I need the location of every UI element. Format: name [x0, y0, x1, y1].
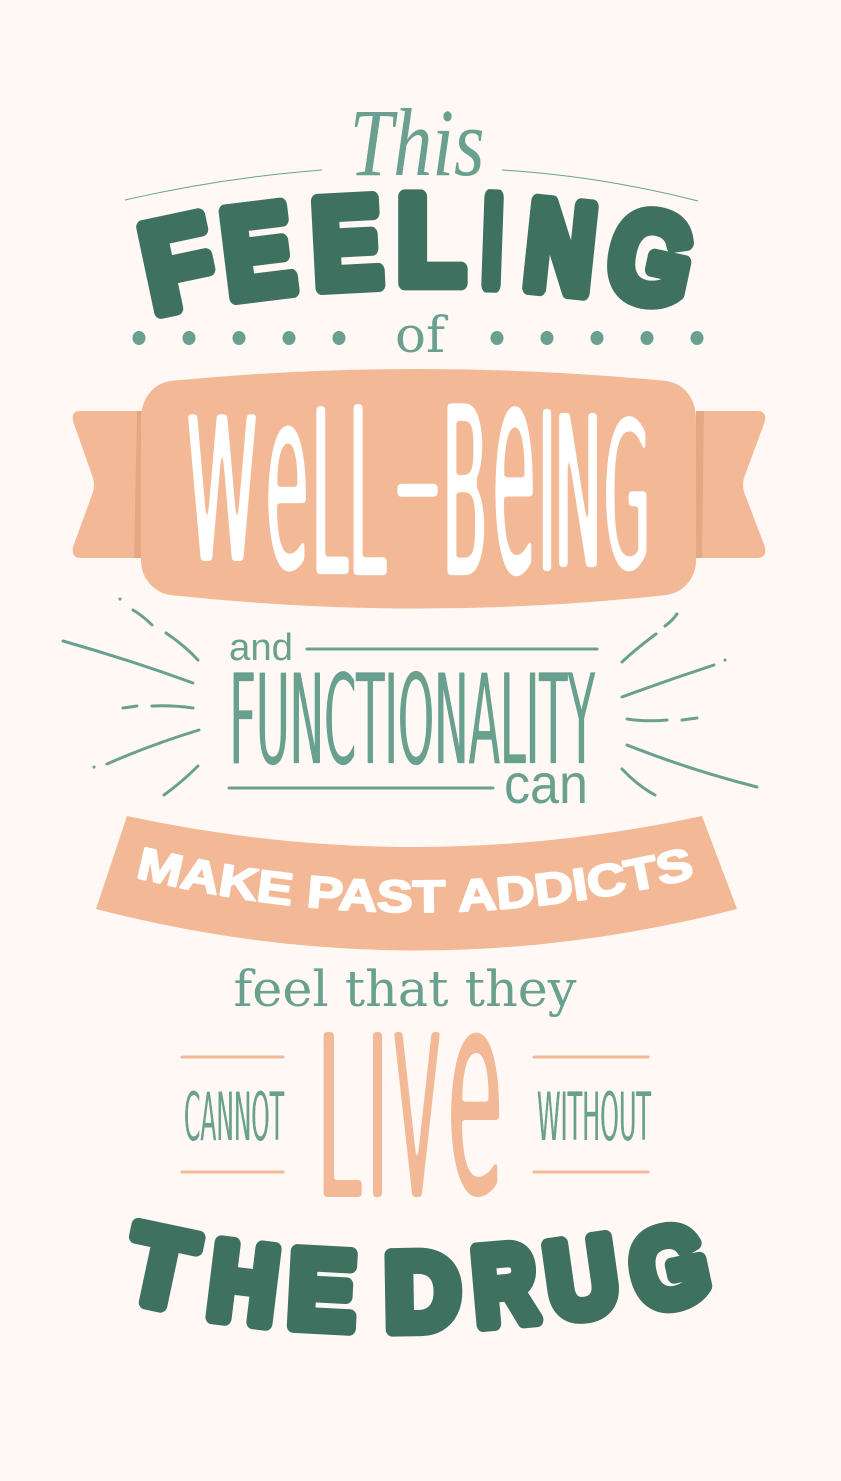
banner lettering: e: [492, 296, 536, 645]
heading: THE DRUG: [117, 1201, 719, 1353]
banner lettering: N: [554, 370, 602, 619]
heading: FEELING: E: [215, 179, 301, 325]
banner lettering: e: [265, 330, 309, 630]
text group: cannot live without: CANNOT: [184, 1077, 284, 1157]
text: WITHOUT: [537, 1077, 651, 1157]
banner lettering: G: [604, 378, 650, 620]
text group: cannot live without: [182, 925, 651, 1263]
ribbon tails: [73, 411, 141, 558]
text group: cannot live without: I: [367, 985, 388, 1252]
heading: This: [125, 89, 698, 201]
text group: cannot live without: V: [394, 985, 440, 1252]
text group: cannot live without: e: [447, 925, 503, 1263]
banner lettering: -: [393, 361, 442, 593]
text: feel that they: feel that they: [234, 962, 577, 1019]
text block: and functionality can: [229, 627, 597, 815]
heading: THE DRUG: H: [203, 1220, 284, 1348]
rays right: [622, 614, 757, 795]
banner lettering: B: [442, 357, 488, 633]
heading: FEELING: L: [397, 169, 465, 310]
banner: well-being: [73, 296, 765, 645]
rays left: [63, 599, 199, 795]
heading: THE DRUG: D: [384, 1231, 461, 1353]
heading: THE DRUG: T: [117, 1202, 205, 1333]
banner lettering: L: [311, 360, 348, 631]
banner lettering: [186, 296, 650, 645]
heading: THE DRUG: R: [468, 1221, 541, 1348]
heading: FEELING: F: [130, 189, 226, 340]
banner body: [141, 369, 696, 608]
heading: FEELING: [130, 169, 705, 340]
heading: FEELING: N: [519, 174, 602, 320]
banner lettering: W: [186, 374, 258, 611]
heading: THE DRUG: G: [620, 1201, 719, 1334]
dotted divider with of: [132, 306, 704, 364]
text block: and functionality can: and: [229, 627, 293, 669]
heading: FEELING: G: [596, 182, 705, 335]
text block: and functionality can: can: [504, 752, 588, 815]
ribbon: make past addicts: [96, 816, 737, 950]
heading: FEELING: E: [309, 173, 385, 315]
dotted divider with of: of: [395, 306, 449, 364]
banner lettering: I: [538, 363, 556, 625]
heading: THE DRUG: E: [286, 1228, 358, 1352]
banner lettering: L: [348, 357, 386, 633]
ribbon: make past addicts: MAKE PAST ADDICTS: [137, 846, 693, 914]
heading: THE DRUG: U: [539, 1213, 625, 1343]
heading: This: This: [350, 89, 484, 196]
text group: cannot live without: L: [317, 986, 361, 1253]
heading: FEELING: I: [481, 172, 504, 312]
